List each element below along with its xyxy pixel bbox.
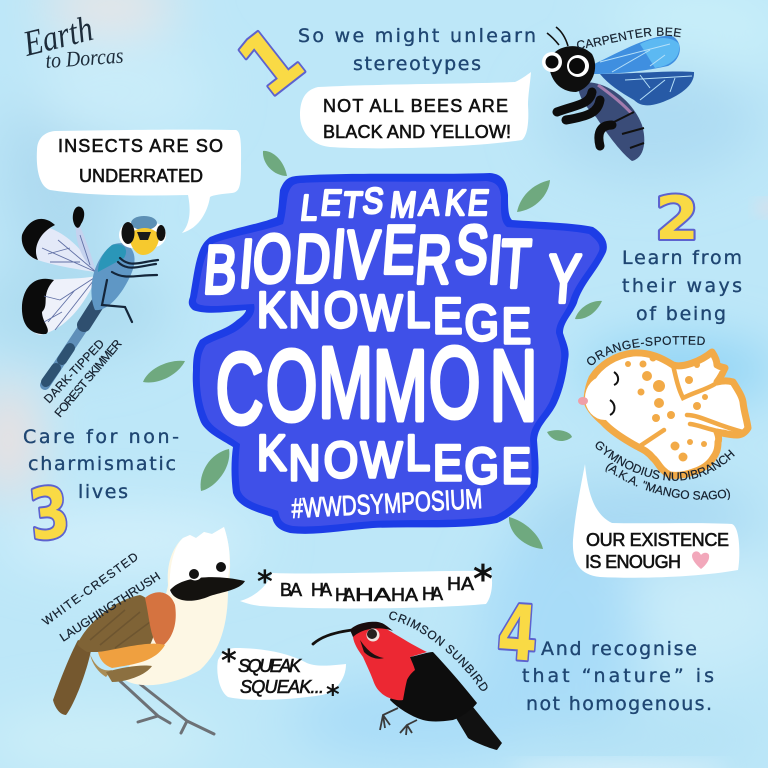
thrush mask and beak [170, 577, 245, 601]
number 1: 1 [222, 10, 321, 116]
heading: lets make: LETS MAKE [299, 182, 491, 229]
logo: Earth to Dorcas: to Dorcas [45, 43, 124, 73]
thrush legs [120, 681, 214, 734]
label: orange-spotted: ORANGE-SPOTTED [587, 336, 705, 366]
thrush tail [53, 640, 92, 715]
label: white-crested: WHITE-CRESTED [40, 549, 141, 628]
heading: knowlege: KNOWLEGE [257, 281, 531, 354]
logo: Earth to Dorcas [18, 8, 124, 73]
bee wings [594, 36, 680, 74]
text: point 2: Learn from [622, 247, 742, 269]
speech bubble: insects underrated [37, 130, 241, 233]
logo: Earth to Dorcas: Earth [18, 8, 97, 64]
speech bubble: bahaha [240, 571, 492, 608]
asterisks: * [221, 644, 237, 679]
text: point 3: lives [78, 481, 128, 503]
label: dark-tipped: DARK-TIPPED [41, 336, 107, 406]
leaves [143, 151, 602, 549]
dragonfly head [119, 222, 145, 248]
speech bubble: bahaha: HA [391, 585, 418, 605]
asterisks: * [326, 680, 340, 710]
thrush wing [77, 595, 156, 652]
asterisks: * [473, 557, 493, 601]
number 2: 2 [655, 184, 699, 254]
speech bubble: insects underrated: UNDERRATED [79, 166, 203, 186]
label: laughingthrush: LAUGHINGTHRUSH [57, 569, 163, 645]
text: point 4: not homogenous. [526, 693, 712, 715]
bee head [549, 46, 595, 92]
text: point 1: stereotypes [353, 53, 481, 75]
sunbird black body [390, 652, 477, 722]
speech bubble: bahaha: HA [311, 580, 332, 600]
speech bubble: squeak [217, 648, 346, 700]
icon: heart [692, 551, 709, 569]
text: point 4 [522, 638, 714, 715]
label: carpenter bee: CARPENTER BEE [576, 27, 682, 49]
sunbird red body [353, 626, 427, 700]
text: point 1: So we might unlearn [298, 25, 536, 47]
nudibranch nose [578, 397, 588, 405]
text: point 4: that “nature” is [522, 665, 714, 687]
thrush crest and belly [125, 527, 230, 685]
speech bubble: insects underrated: INSECTS ARE SO [58, 136, 223, 156]
text: point 2: of being [636, 303, 726, 325]
speech bubble: bahaha: HA [447, 574, 474, 594]
speech bubble: not all bees [300, 72, 531, 148]
speech bubble: bahaha: BA [280, 580, 302, 600]
bee legs [557, 92, 612, 146]
sunbird beak [313, 630, 352, 644]
speech bubble: bahaha: HA [335, 585, 355, 605]
label: gymnodius nudibranch: GYMNODIUS NUDIBRANCH [596, 441, 735, 481]
speech bubble: bahaha: HA [355, 585, 391, 605]
asterisks [221, 557, 493, 710]
number 3: 3 [25, 471, 74, 557]
nudibranch eyes [610, 372, 618, 415]
speech bubble: our existence [573, 464, 739, 578]
text: point 3 [23, 426, 179, 503]
dragonfly thorax [91, 243, 135, 310]
speech bubble: our existence: OUR EXISTENCE [586, 530, 729, 550]
text: point 2: their ways [622, 275, 742, 297]
thrush rust and orange patches [145, 592, 176, 648]
label: crimson sunbird: CRIMSON SUNBIRD [389, 612, 488, 691]
speech bubble: squeak: SQUEAK... [240, 677, 324, 697]
speech bubble: our existence: IS ENOUGH [585, 552, 681, 572]
speech bubble: not all bees: BLACK AND YELLOW! [323, 122, 511, 142]
nudibranch spots [625, 354, 708, 462]
dragonfly wings [26, 226, 96, 272]
label: a.k.a. mango sago: (A.K.A. "MANGO SAGO) [606, 462, 730, 500]
speech bubble: not all bees: NOT ALL BEES ARE [323, 96, 508, 116]
illustration: nudibranch [578, 352, 748, 475]
central blue blob with heading [189, 173, 607, 534]
illustration: sunbird [313, 622, 502, 750]
speech bubble: squeak: SQUEAK [238, 656, 302, 676]
text: point 3: charmismatic [28, 453, 176, 475]
speech bubble: bahaha: HA [422, 584, 443, 604]
dragonfly abdomen [45, 303, 98, 385]
sunbird eye [366, 628, 380, 642]
bee antennae [547, 27, 568, 46]
asterisks: * [257, 565, 273, 600]
label: forest skimmer: FOREST SKIMMER [52, 336, 125, 420]
sunbird cap [350, 622, 393, 637]
sunbird legs [380, 708, 417, 735]
nudibranch body [587, 352, 748, 475]
text: point 4: And recognise [541, 638, 697, 660]
number 4: 4 [495, 587, 541, 679]
bee body [578, 82, 644, 161]
text: point 2 [622, 247, 742, 325]
hashtag: #WWDSYMPOSIUM [291, 483, 483, 524]
illustration: laughingthrush [53, 527, 245, 734]
illustration: dragonfly [22, 207, 166, 385]
sunbird throat stripe [360, 640, 384, 659]
dragonfly legs [102, 258, 158, 322]
heading: common: COMMON [216, 326, 537, 444]
text: point 3: Care for non- [23, 426, 179, 448]
heading: knowlege second: KNOWLEGE [257, 424, 531, 494]
heading: biodiversity: BIODIVERSITY [201, 211, 585, 317]
illustration: carpenter bee [542, 27, 694, 161]
sunbird tail [453, 707, 502, 750]
text: point 1 [298, 25, 536, 75]
